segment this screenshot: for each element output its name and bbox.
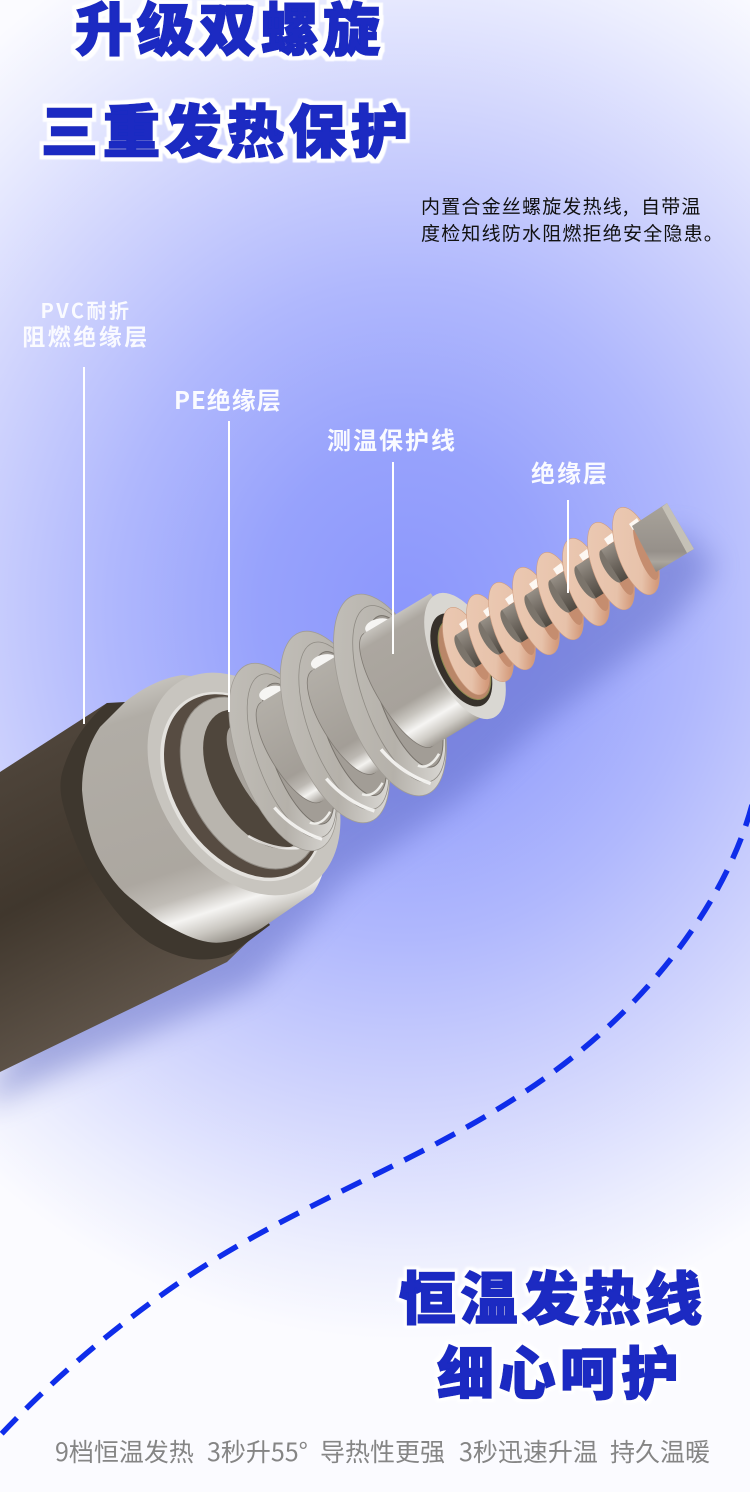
callout: PVC layer: 阻燃绝缘层	[22, 318, 150, 352]
silver spiral ring C	[311, 580, 469, 810]
dashed curve	[0, 805, 750, 1442]
front silver tube	[346, 593, 499, 757]
cable drop shadow	[0, 530, 715, 1108]
tube end face	[407, 581, 523, 731]
feature list: 9档恒温发热	[55, 1433, 194, 1469]
title: triple heating protection: 三重发热保护	[41, 87, 413, 169]
callout: PE insulation: PE绝缘层	[174, 381, 282, 416]
copper heating coil and grey core	[433, 501, 694, 701]
callout: PVC layer: PVC耐折	[40, 295, 132, 324]
inner tube segment 1	[213, 705, 326, 836]
silver spiral ring B	[258, 617, 412, 837]
black outer jacket	[0, 703, 262, 1072]
feature list: 持久温暖	[610, 1433, 710, 1469]
callout: insulation: 绝缘层	[531, 454, 609, 489]
description text: 度检知线防水阻燃拒绝安全隐患。	[421, 219, 724, 246]
description text: 自带温	[641, 192, 702, 219]
feature list: 3秒升55°	[207, 1433, 308, 1469]
silver spiral ring A	[207, 650, 359, 864]
callout: PVC layer	[22, 295, 150, 724]
title: careful care: 细心呵护	[437, 1329, 683, 1411]
grey core tip	[632, 503, 694, 572]
feature list: 导热性更强	[320, 1433, 445, 1469]
feature list: 3秒迅速升温	[459, 1433, 598, 1469]
description text: 内置合金丝螺旋发热线,	[421, 192, 629, 219]
cable illustration	[0, 501, 694, 1072]
callout: temperature wire: 测温保护线	[327, 421, 457, 456]
tube segment 3	[294, 642, 421, 784]
title: constant temperature heating wire: 恒温发热线	[399, 1254, 706, 1336]
collar front rim and hole	[108, 637, 380, 931]
silver ring behind	[152, 672, 348, 894]
PVC silver collar	[82, 675, 345, 943]
callout: insulation	[531, 454, 609, 593]
tube segment 2	[243, 674, 368, 813]
dark jacket end ring	[60, 702, 270, 960]
